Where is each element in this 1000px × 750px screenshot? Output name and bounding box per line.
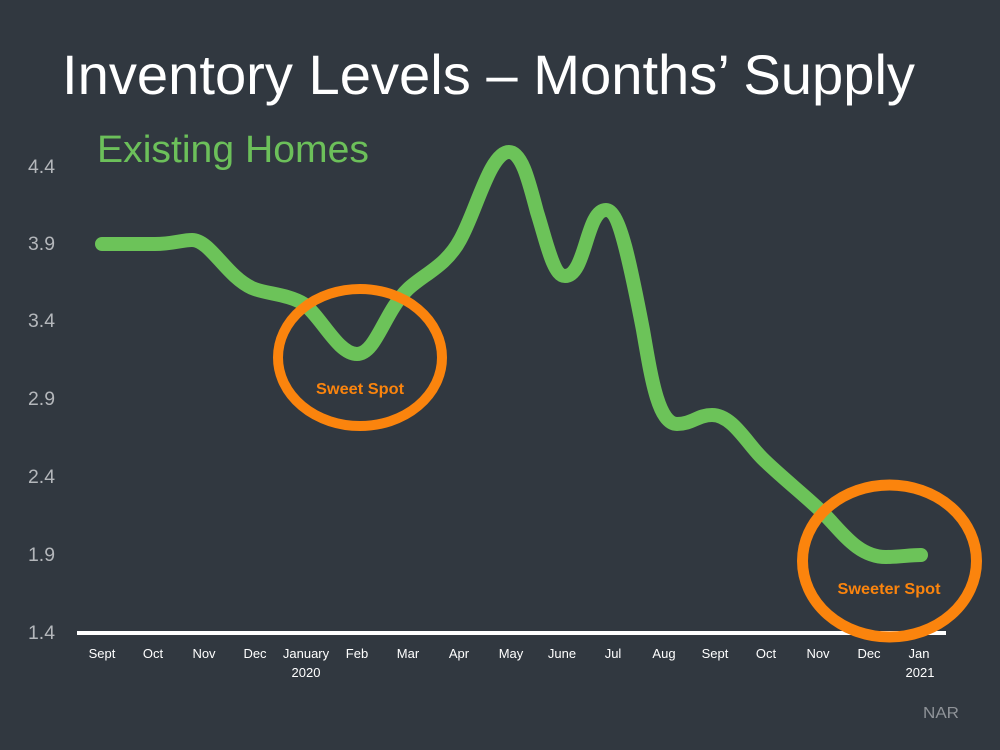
title: Inventory Levels – Months’ Supply bbox=[62, 43, 915, 106]
source: NAR: NAR bbox=[923, 705, 959, 722]
x axis month labels: Sept bbox=[702, 646, 729, 661]
x axis month labels: Feb bbox=[346, 646, 368, 661]
y axis labels bbox=[28, 157, 55, 644]
y axis labels: 4.4 bbox=[28, 157, 55, 178]
y axis labels: 3.4 bbox=[28, 311, 55, 332]
x axis month labels: Apr bbox=[449, 646, 470, 661]
x axis month labels: Aug bbox=[652, 646, 676, 661]
x axis month labels: Nov bbox=[192, 646, 216, 661]
x axis month labels: January bbox=[283, 646, 330, 661]
x axis month labels: Nov bbox=[806, 646, 830, 661]
x axis month labels: Dec bbox=[857, 646, 881, 661]
x axis month labels: 2021 bbox=[906, 665, 934, 680]
callout ring: sweeter spot bbox=[802, 485, 976, 637]
callout label: Sweeter Spot: Sweeter Spot bbox=[838, 581, 941, 598]
x axis month labels: June bbox=[548, 646, 576, 661]
x axis month labels: Jan bbox=[909, 646, 929, 661]
y axis labels: 2.4 bbox=[28, 467, 55, 488]
x axis baseline bbox=[77, 631, 946, 635]
x axis month labels: Sept bbox=[89, 646, 116, 661]
x axis month labels: Oct bbox=[756, 646, 776, 661]
x axis month labels: Oct bbox=[143, 646, 163, 661]
x axis month labels: May bbox=[499, 646, 524, 661]
y axis labels: 1.9 bbox=[28, 545, 55, 566]
y axis labels: 3.9 bbox=[28, 234, 55, 255]
x axis month labels: 2020 bbox=[292, 665, 320, 680]
x axis month labels: Mar bbox=[397, 646, 420, 661]
x axis month labels bbox=[89, 646, 934, 680]
subtitle: Existing Homes: Existing Homes bbox=[97, 129, 369, 171]
y axis labels: 1.4 bbox=[28, 623, 55, 644]
y axis labels: 2.9 bbox=[28, 389, 55, 410]
callout ring: sweet spot bbox=[278, 289, 442, 426]
x axis month labels: Jul bbox=[605, 646, 621, 661]
x axis month labels: Dec bbox=[243, 646, 267, 661]
line chart: months' supply bbox=[102, 152, 921, 557]
callout label: Sweet Spot: Sweet Spot bbox=[316, 381, 405, 398]
